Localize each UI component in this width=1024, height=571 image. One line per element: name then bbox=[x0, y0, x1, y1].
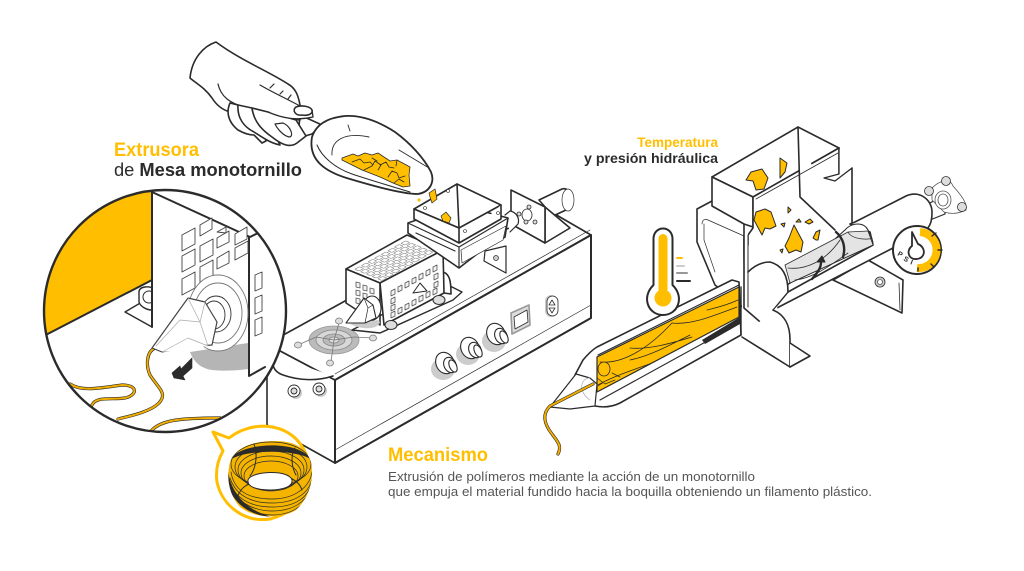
control knobs bbox=[431, 320, 510, 380]
output nozzle bbox=[346, 296, 381, 328]
label: Temperatura: Temperatura bbox=[637, 135, 718, 150]
heading: Mecanismo: Mecanismo bbox=[388, 445, 488, 466]
fan grill bbox=[294, 318, 376, 366]
inner screw section bbox=[785, 231, 873, 283]
hand holding scoop bbox=[190, 42, 432, 194]
side screws bbox=[288, 383, 327, 399]
heat-break cage bbox=[346, 235, 462, 333]
hand outline bbox=[190, 42, 313, 145]
toggle switch bbox=[545, 295, 558, 317]
pressure gauge: P bbox=[896, 251, 904, 259]
base bolts bbox=[385, 296, 445, 330]
pressure gauge bbox=[893, 226, 942, 274]
title: Extrusora: Extrusora bbox=[114, 140, 199, 161]
hopper box bbox=[712, 127, 852, 310]
callout bubble bbox=[213, 426, 310, 520]
spool hole bbox=[248, 472, 292, 490]
subtitle: de Mesa monotornillo: de Mesa monotornillo bbox=[114, 160, 302, 180]
rear motor bbox=[505, 189, 574, 243]
hopper pellets bbox=[417, 189, 451, 223]
cutaway screw mechanism bbox=[545, 127, 966, 454]
back housing bbox=[697, 201, 744, 308]
rotation arrows bbox=[812, 232, 844, 279]
hopper pellets right bbox=[746, 158, 820, 253]
pressure gauge: I bbox=[909, 259, 914, 267]
label: presión hidráulica: y presión hidráulica bbox=[584, 150, 718, 166]
description text: Extrusión de polímeros mediante la acción de un monotornillo bbox=[388, 469, 755, 484]
scoop bbox=[298, 115, 432, 194]
extruded filament bbox=[545, 384, 593, 454]
floor filament strands bbox=[70, 348, 220, 430]
feed hopper bbox=[408, 184, 508, 273]
pile of pellets in scoop bbox=[342, 153, 410, 187]
front wall and support bbox=[742, 232, 810, 367]
heater wall bbox=[153, 292, 156, 302]
filament spool callout bbox=[213, 426, 320, 523]
table-top extruder machine bbox=[267, 184, 591, 463]
floor bracket and bolt bbox=[125, 287, 155, 327]
motion arrow and shadow bbox=[190, 343, 248, 371]
machine body bbox=[267, 213, 591, 463]
barrel cross-section bbox=[575, 280, 741, 407]
thermometer bbox=[647, 228, 690, 315]
barrel tube rear bbox=[773, 194, 932, 310]
nozzle cutaway bbox=[550, 374, 597, 409]
spool body bbox=[228, 441, 312, 516]
yellow background wedge bbox=[45, 192, 151, 334]
description text: que empuja el material fundido hacia la boquilla obteniendo un filamento plástico. bbox=[388, 484, 872, 499]
nozzle bbox=[152, 275, 248, 352]
vent squares bbox=[182, 218, 262, 336]
zoomed detail circle bbox=[40, 185, 286, 440]
digital display bbox=[511, 305, 530, 334]
rear bracket bbox=[833, 260, 903, 313]
pressure gauge: S bbox=[902, 256, 910, 264]
rear shaft flange bbox=[924, 176, 966, 220]
